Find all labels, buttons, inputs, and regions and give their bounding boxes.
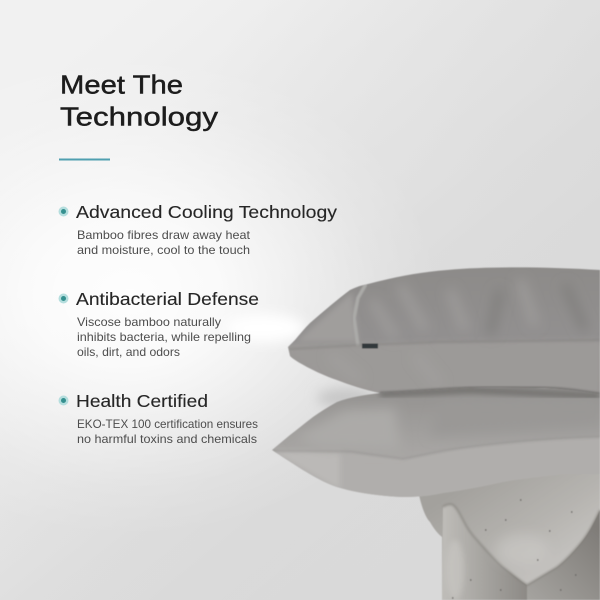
feature: certified: no harmful toxins and chemicals [77,432,257,446]
feature: certified: EKO-TEX 100 certification ensures [77,417,258,431]
title accent line [59,158,110,160]
product photo: pillows on stone pedestal [272,267,600,600]
bullet icon [58,206,68,216]
bullet icon [58,396,68,406]
feature: antibacterial: inhibits bacteria, while repelling [77,330,251,344]
pillow label tag [362,344,378,348]
feature: cooling: and moisture, cool to the touch [77,243,250,257]
title [60,70,218,132]
feature: cooling: Bamboo fibres draw away heat [77,228,251,242]
lower pillow [272,386,600,503]
stone pedestal [418,465,600,600]
bullet icon [58,294,68,304]
feature: certified [58,391,258,446]
feature: antibacterial: oils, dirt, and odors [77,345,180,359]
upper pillow [288,267,600,396]
feature: antibacterial [58,289,259,359]
title: Meet The [60,70,183,100]
feature: certified: Health Certified [76,391,208,411]
feature: cooling: Advanced Cooling Technology [76,202,337,222]
feature: cooling [58,202,337,257]
feature: antibacterial: Viscose bamboo naturally [77,315,221,329]
feature: antibacterial: Antibacterial Defense [76,289,259,309]
title: Technology [60,102,218,132]
